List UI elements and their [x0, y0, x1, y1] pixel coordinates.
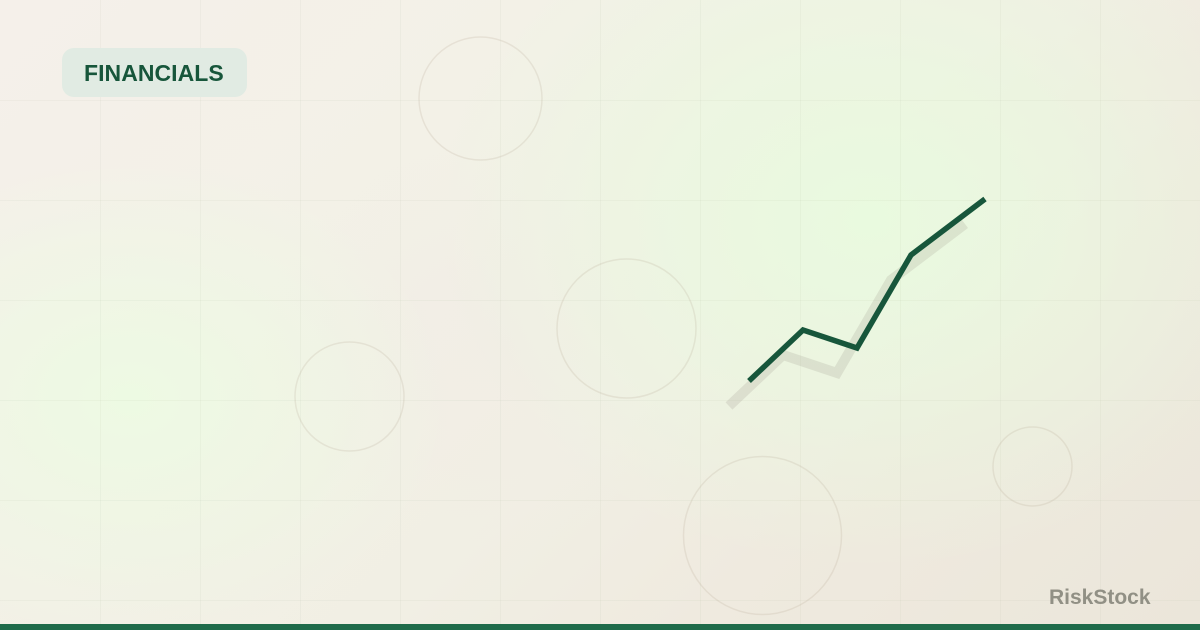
bottom bar — [0, 624, 1200, 630]
brand wordmark: RiskStock — [1049, 586, 1151, 609]
chart line — [749, 199, 985, 381]
chart line shadow — [729, 224, 965, 406]
category badge — [62, 48, 247, 97]
category badge: FINANCIALS — [84, 60, 224, 86]
